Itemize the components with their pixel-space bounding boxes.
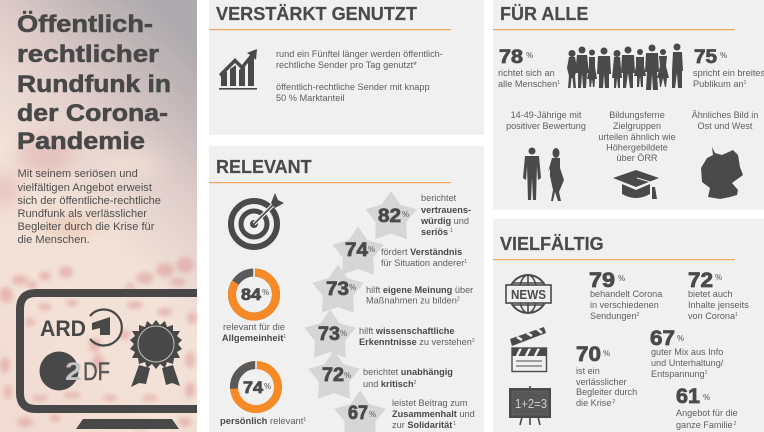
text: education: Höhergebildete [606, 142, 668, 152]
panel: für alle [493, 0, 764, 210]
stat: 79 percent: behandelt Corona [590, 289, 663, 299]
text: education: Zielgruppen [613, 121, 661, 131]
text: east and west: Ähnliches Bild in [692, 110, 758, 120]
stat: 74 percent: % [368, 245, 375, 254]
title: Pandemie [17, 128, 145, 155]
panel: title sidebar [0, 0, 197, 432]
heading: VERSTÄRKT GENUTZT [216, 4, 417, 24]
logo: ZDF: DF [83, 358, 110, 386]
heading: VIELFÄLTIG [500, 234, 604, 254]
stat: 72 percent: 1 [735, 312, 738, 318]
text: age group: 14-49-Jährige mit [511, 110, 582, 120]
stat: 72 percent: 72 [688, 268, 713, 292]
stat: 82 percent [365, 191, 471, 239]
donut chart: 84 percent [232, 268, 276, 316]
stat: 67 percent: zur Solidarität [392, 420, 452, 430]
intro text: Rundfunk als verlässlicher [18, 208, 147, 220]
stat: 78 percent: % [526, 51, 533, 60]
text: usage: öffentlich-rechtliche Sender mit knapp [276, 82, 430, 92]
stat: 82 percent: seriös [421, 227, 448, 237]
panel: verstärkt genutzt [209, 0, 484, 135]
label: relevant für die: relevant für die [223, 321, 285, 332]
stat: 67 percent: 1 [453, 421, 456, 427]
stat: 72 percent: und kritisch [363, 379, 414, 389]
donut chart: 74 percent [233, 360, 279, 410]
text: usage: 50 % Marktanteil [276, 93, 344, 103]
stat: 70 percent: Begleiter durch [576, 387, 637, 397]
stat: 74 percent: 74 [345, 240, 368, 261]
stat: 74 percent [332, 226, 467, 275]
icon: television frame [20, 293, 197, 429]
stat: 67 percent [650, 326, 724, 379]
stat: 75 percent [693, 46, 764, 89]
stat: 75 percent: 1 [744, 80, 747, 86]
stat: 61 percent [676, 384, 738, 430]
stat: 67 percent: Zusammenhalt und [392, 409, 475, 419]
title [17, 11, 171, 155]
stat: 72 percent: berichtet unabhängig [363, 367, 453, 377]
text: education [598, 110, 676, 163]
stat: 72 percent: 72 [322, 365, 344, 386]
stat: 74 percent: fördert Verständnis [381, 247, 462, 257]
text: east and west [692, 110, 758, 131]
icon: young couple [523, 148, 564, 201]
stat: 70 percent: die Krise [576, 398, 611, 408]
icon: news globe: NEWS [511, 287, 546, 302]
label: persönlich relevant: persönlich relevant [220, 415, 303, 426]
stat: 72 percent: % [715, 273, 722, 282]
stat: 79 percent: in verschiedenen [590, 300, 659, 310]
icon: film clapperboard [510, 327, 546, 372]
stat: 73 percent opinion: 73 [326, 279, 349, 300]
intro text [18, 168, 161, 246]
stat: 70 percent [576, 342, 637, 408]
stat: 61 percent: 2 [734, 421, 737, 427]
logo: ARD: ARD [40, 316, 86, 341]
stat: 67 percent: 67 [348, 403, 368, 424]
text: age group [506, 110, 586, 131]
icon: group of people [567, 44, 683, 90]
logo: ZDF [40, 352, 110, 390]
stat: 73 percent opinion: Maßnahmen zu bilden [366, 296, 457, 306]
stat: 73 percent opinion: hilft eigene Meinung über [366, 285, 473, 295]
title: der Corona- [17, 100, 168, 127]
text: education: Bildungsferne [609, 110, 665, 120]
stat: 70 percent: % [603, 349, 610, 358]
icon: chalkboard: 1+2=3 [515, 397, 547, 411]
icon: news globe [506, 275, 551, 313]
stat: 73 percent opinion: % [349, 283, 356, 292]
stat: 61 percent: % [703, 393, 710, 402]
stat: 67 percent: 1 [705, 370, 708, 376]
text: education: urteilen ähnlich wie [598, 132, 676, 142]
donut chart: 74 percent: % [264, 382, 271, 391]
stat: 75 percent: % [720, 51, 727, 60]
label: Allgemeinheit: 1 [283, 334, 286, 340]
title: rechtlicher [17, 41, 160, 68]
title: Rundfunk in [17, 71, 171, 98]
stat: 72 percent [308, 350, 453, 399]
stat: 73 percent science: Erkenntnisse zu verstehen [359, 337, 472, 347]
donut chart: 74 percent: 74 [243, 379, 264, 397]
icon: target with arrow [231, 193, 284, 247]
stat: 70 percent: 70 [576, 342, 601, 366]
stat: 79 percent: Sendungen [590, 311, 637, 321]
stat: 61 percent: 61 [676, 384, 700, 408]
label: Allgemeinheit: Allgemeinheit [222, 332, 283, 343]
stat: 82 percent: 82 [378, 206, 401, 227]
title: Öffentlich- [17, 11, 153, 38]
icon: award rosette [130, 320, 182, 387]
donut chart: 84 percent: % [262, 288, 269, 297]
stat: 67 percent: Entspannung [651, 369, 705, 379]
stat: 67 percent: guter Mix aus Info [651, 347, 723, 357]
stat: 79 percent: % [618, 274, 625, 283]
stat: 70 percent: verlässlicher [576, 377, 627, 387]
stat: 78 percent: 78 [499, 46, 523, 68]
icon: graduation cap [613, 170, 659, 199]
stat: 73 percent opinion: 2 [457, 296, 460, 302]
stat: 78 percent [498, 46, 560, 89]
panel: relevant [209, 146, 484, 432]
stat: 67 percent: 67 [650, 326, 675, 350]
stat: 73 percent science [304, 310, 475, 358]
stat: 67 percent: und Unterhaltung/ [651, 358, 724, 368]
stat: 78 percent: 1 [557, 80, 560, 86]
stat: 67 percent: % [677, 334, 684, 343]
stat: 70 percent: ist ein [576, 366, 600, 376]
intro text: die Menschen. [18, 234, 90, 246]
stat: 75 percent: Publikum an [693, 79, 744, 89]
stat: 67 percent: leistet Beitrag zum [392, 398, 468, 408]
stat: 74 percent: für Situation anderer [381, 258, 464, 268]
logo: ARD [40, 310, 122, 346]
text: usage: rechtliche Sender pro Tag genutzt* [276, 60, 417, 70]
stat: 73 percent opinion [312, 264, 473, 313]
stat: 70 percent: 2 [612, 399, 615, 405]
text: usage [276, 49, 443, 103]
stat: 73 percent science: hilft wissenschaftliche [359, 326, 454, 336]
stat: 73 percent science: 73 [318, 324, 340, 345]
stat: 72 percent: % [344, 371, 351, 380]
intro text: vielfältigen Angebot erweist [18, 182, 152, 194]
logo: ZDF: 2 [65, 358, 82, 386]
stat: 79 percent: 79 [589, 268, 615, 292]
stat: 79 percent: 2 [637, 312, 640, 318]
stat: 61 percent: ganze Familie [676, 420, 733, 430]
stat: 73 percent science: 2 [472, 338, 475, 344]
icon: rising bar chart [219, 49, 257, 90]
stat: 74 percent: 1 [464, 259, 467, 265]
stat: 82 percent: vertrauens- [421, 205, 471, 215]
panel: vielfältig [493, 219, 764, 432]
stat: 72 percent: bietet auch [688, 289, 732, 299]
stat: 67 percent: % [369, 410, 376, 419]
stat: 61 percent: Angebot für die [676, 408, 738, 418]
icon: chalkboard [509, 386, 551, 425]
donut chart: 84 percent: 84 [241, 286, 262, 304]
stat: 72 percent: 2 [414, 380, 417, 386]
intro text: sich der öffentliche-rechtliche [18, 195, 161, 207]
text: usage: rund ein Fünftel länger werden öffentlich- [276, 49, 443, 59]
stat: 82 percent: berichtet [421, 193, 457, 203]
text: age group: positiver Bewertung [506, 121, 586, 131]
stat: 73 percent science: % [340, 329, 347, 338]
heading: FÜR ALLE [500, 4, 588, 24]
stat: 72 percent [688, 268, 749, 321]
stat: 78 percent: richtet sich an [498, 68, 555, 78]
intro text: Mit seinem seriösen und [18, 168, 138, 180]
stat: 67 percent [334, 390, 475, 432]
intro text: Begleiter durch die Krise für [18, 221, 155, 233]
stat: 82 percent: würdig und [420, 216, 469, 226]
stat: 75 percent: 75 [694, 46, 717, 68]
stat: 78 percent: alle Menschen [498, 79, 557, 89]
text: east and west: Ost und West [698, 121, 753, 131]
stat: 79 percent [589, 268, 663, 321]
heading: RELEVANT [216, 157, 312, 177]
text: education: über ÖRR [617, 153, 658, 163]
icon: map of Germany [701, 147, 743, 199]
stat: 72 percent: Inhalte jenseits [688, 300, 749, 310]
label: persönlich relevant: 1 [303, 417, 306, 423]
stat: 75 percent: spricht ein breites [693, 68, 764, 78]
stat: 82 percent: 1 [450, 228, 453, 234]
stat: 82 percent: % [402, 210, 409, 219]
stat: 72 percent: von Corona [688, 311, 735, 321]
